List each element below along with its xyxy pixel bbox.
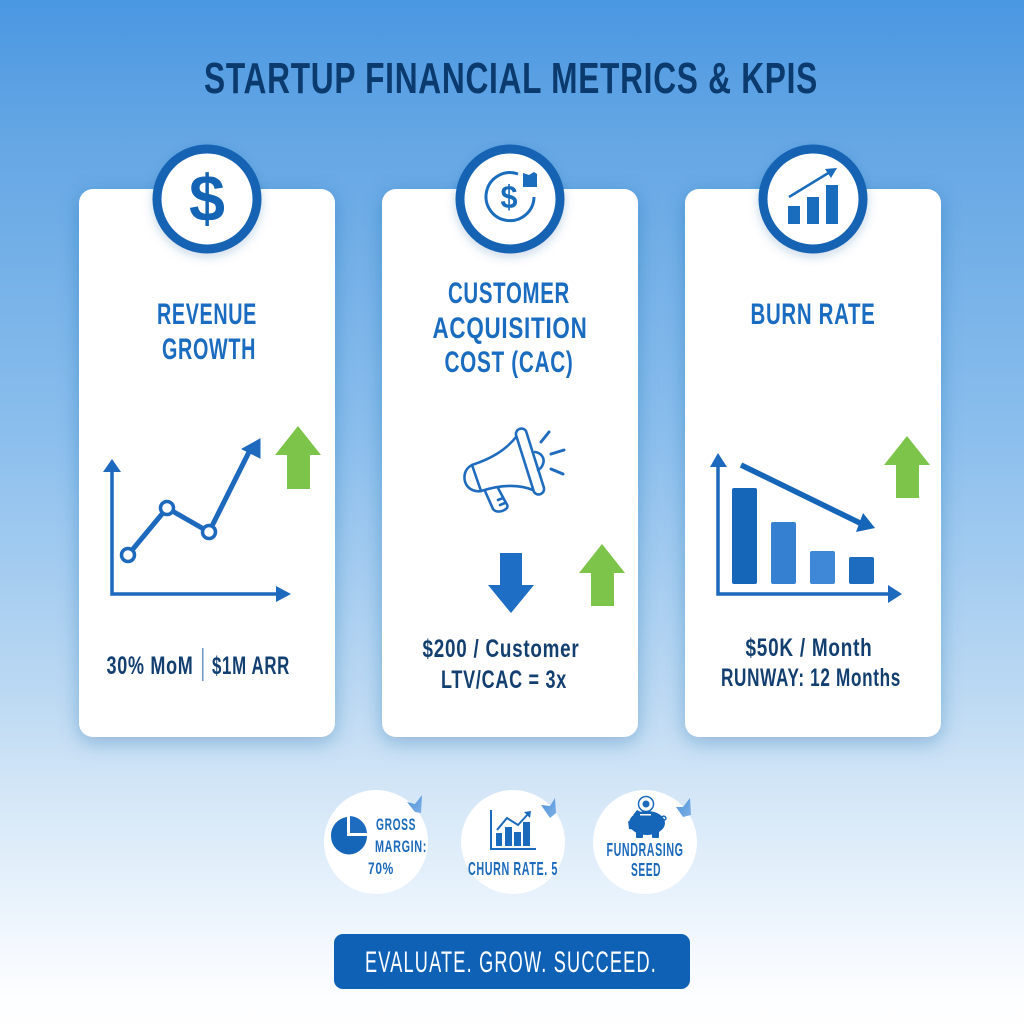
metric text: $200 / Customer bbox=[422, 635, 580, 663]
arrow: green up bbox=[275, 426, 321, 489]
heading: customer acquisition cost bbox=[432, 277, 588, 379]
heading: customer acquisition cost: COST (CAC) bbox=[444, 346, 574, 379]
label bbox=[368, 815, 427, 878]
metric text: 30% MoM bbox=[106, 652, 194, 680]
label: FUNDRASING bbox=[606, 840, 684, 860]
arrow: green up bbox=[579, 544, 625, 606]
icon: growth bars badge bbox=[763, 149, 863, 249]
metric text bbox=[422, 635, 580, 694]
icon: dollar badge: $ bbox=[189, 161, 225, 235]
card background bbox=[79, 189, 335, 737]
icon: mini chart bbox=[490, 810, 536, 850]
footer banner bbox=[334, 934, 690, 989]
icon: pie chart bbox=[331, 816, 367, 854]
icon: corner tab bbox=[676, 798, 691, 817]
icon: dollar cycle badge bbox=[460, 149, 560, 249]
label: SEED bbox=[631, 860, 661, 880]
label: MARGIN: bbox=[375, 837, 427, 856]
footer banner: EVALUATE. GROW. SUCCEED. bbox=[365, 946, 657, 979]
card background bbox=[685, 189, 941, 737]
metric text: RUNWAY: 12 Months bbox=[721, 664, 901, 692]
icon: corner tab bbox=[541, 798, 556, 818]
heading: revenue growth: REVENUE bbox=[157, 298, 257, 331]
metric text: LTV/CAC = 3x bbox=[441, 666, 567, 694]
line chart bbox=[103, 439, 291, 602]
badge: churn rate bbox=[461, 790, 565, 894]
panel: customer acquisition cost bbox=[382, 149, 638, 737]
label: CHURN RATE. 5 bbox=[468, 859, 558, 879]
metric text: $50K / Month bbox=[746, 634, 872, 662]
badge: fundraising seed bbox=[593, 790, 697, 894]
panel: revenue growth bbox=[79, 149, 335, 737]
label: GROSS bbox=[376, 815, 416, 834]
card background bbox=[382, 189, 638, 737]
icon: megaphone bbox=[464, 429, 564, 512]
heading: customer acquisition cost: CUSTOMER bbox=[448, 277, 570, 310]
heading: revenue growth: GROWTH bbox=[162, 333, 256, 366]
metric text bbox=[721, 634, 901, 692]
arrow: blue down bbox=[488, 553, 534, 613]
icon: dollar cycle badge: $ bbox=[500, 179, 518, 215]
badge: gross margin bbox=[324, 790, 428, 894]
label bbox=[606, 840, 684, 880]
label: 70% bbox=[368, 859, 394, 878]
panel: burn rate bbox=[685, 149, 941, 737]
arrow: green up bbox=[884, 436, 930, 498]
bar chart bbox=[710, 453, 902, 603]
heading: revenue growth bbox=[157, 298, 257, 366]
icon: piggy bank bbox=[628, 796, 666, 838]
metric text bbox=[106, 648, 290, 681]
metric text: $1M ARR bbox=[212, 652, 290, 680]
icon: corner tab bbox=[407, 795, 422, 813]
heading: burn rate: BURN RATE bbox=[750, 298, 876, 331]
heading: customer acquisition cost: ACQUISITION bbox=[432, 312, 588, 345]
icon: dollar badge bbox=[157, 149, 257, 249]
